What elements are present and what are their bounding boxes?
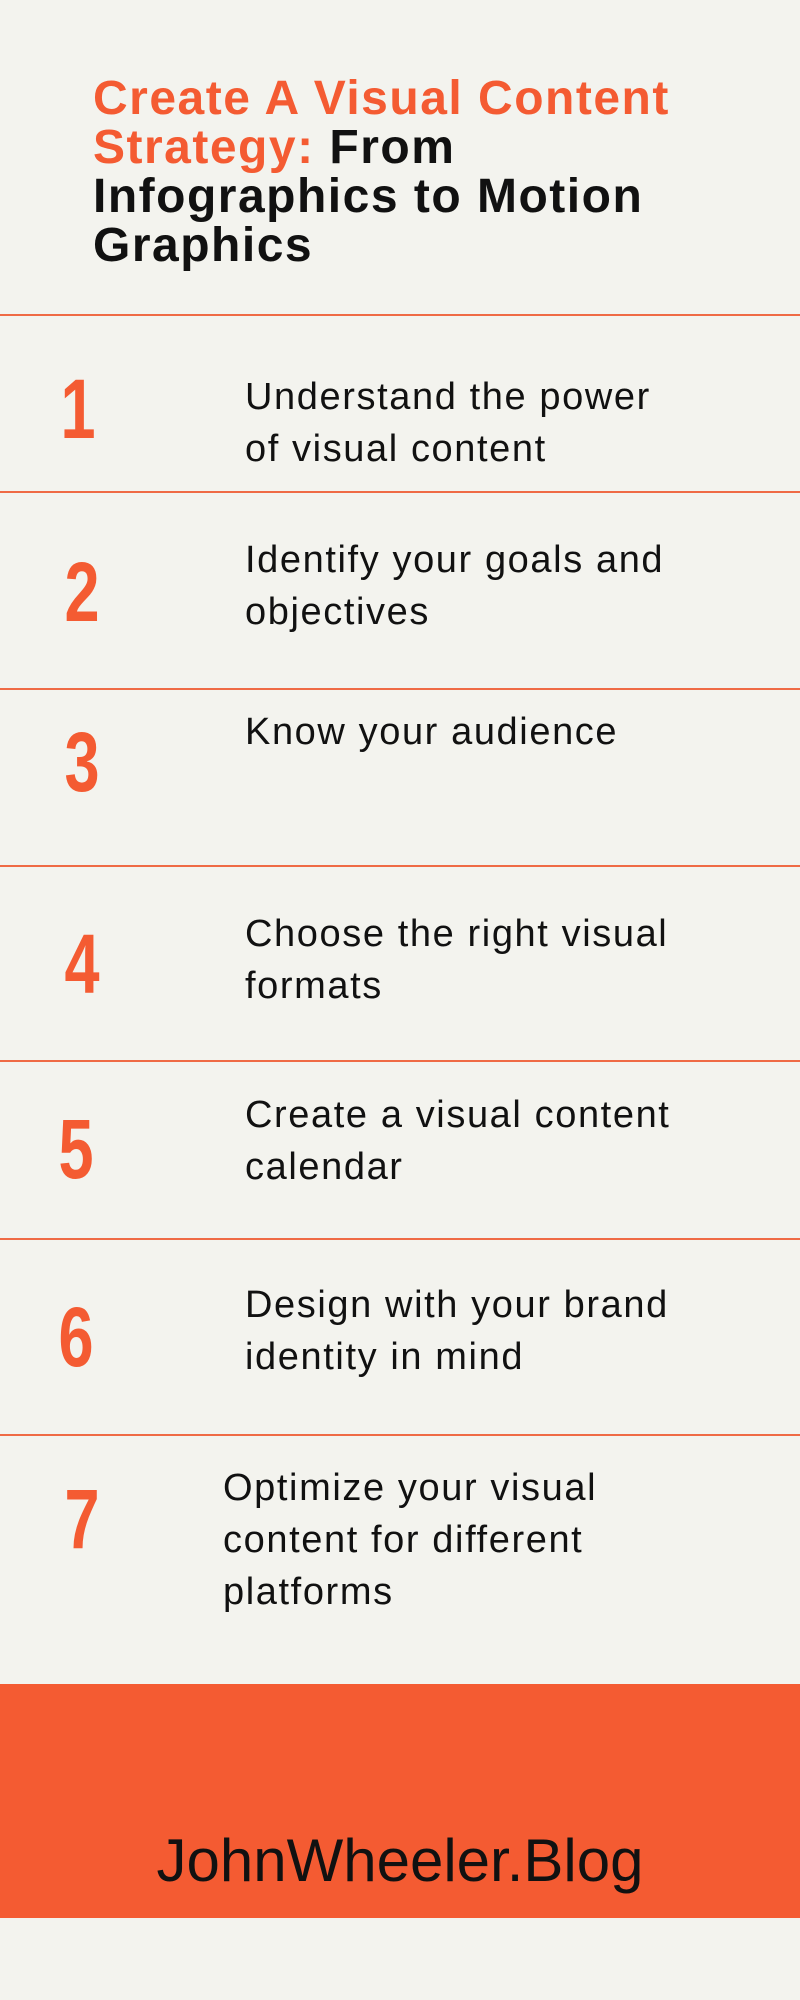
text 5 — [245, 1094, 670, 1188]
text 2: Identify your goals and — [245, 539, 664, 581]
text 7: content for different — [223, 1519, 583, 1561]
text 7: Optimize your visual — [223, 1467, 597, 1509]
text 7: platforms — [223, 1571, 394, 1613]
step 2 — [64, 539, 664, 639]
text 5: Create a visual content — [245, 1094, 670, 1136]
text 5: calendar — [245, 1146, 404, 1188]
text 7 — [223, 1467, 597, 1613]
step 3 — [64, 711, 618, 809]
number 4: 4 — [64, 917, 100, 1011]
text 6 — [245, 1284, 669, 1378]
text 3: Know your audience — [245, 711, 618, 753]
number 6: 6 — [58, 1290, 94, 1384]
number 7: 7 — [64, 1472, 100, 1566]
text 4: formats — [245, 965, 383, 1007]
text 1: Understand the power — [245, 376, 651, 418]
number 3: 3 — [64, 715, 100, 809]
number 5: 5 — [58, 1102, 94, 1196]
step 7 — [64, 1467, 597, 1613]
step 1 — [60, 362, 651, 470]
step 4 — [64, 913, 668, 1011]
text 6: identity in mind — [245, 1336, 524, 1378]
text 1 — [245, 376, 651, 470]
title — [93, 72, 670, 272]
title: Infographics to Motion — [93, 170, 643, 223]
title: Strategy: From — [93, 121, 455, 174]
number 2: 2 — [64, 545, 100, 639]
step 5 — [58, 1094, 670, 1196]
footer banner — [0, 1684, 800, 1918]
title: Create A Visual Content — [93, 72, 670, 125]
step 6 — [58, 1284, 669, 1384]
text 4 — [245, 913, 668, 1007]
text 6: Design with your brand — [245, 1284, 669, 1326]
text 2: objectives — [245, 591, 430, 633]
text 1: of visual content — [245, 428, 547, 470]
footer text: JohnWheeler.Blog — [156, 1827, 643, 1894]
text 4: Choose the right visual — [245, 913, 668, 955]
title: Graphics — [93, 219, 313, 272]
text 2 — [245, 539, 664, 633]
number 1: 1 — [60, 362, 96, 456]
